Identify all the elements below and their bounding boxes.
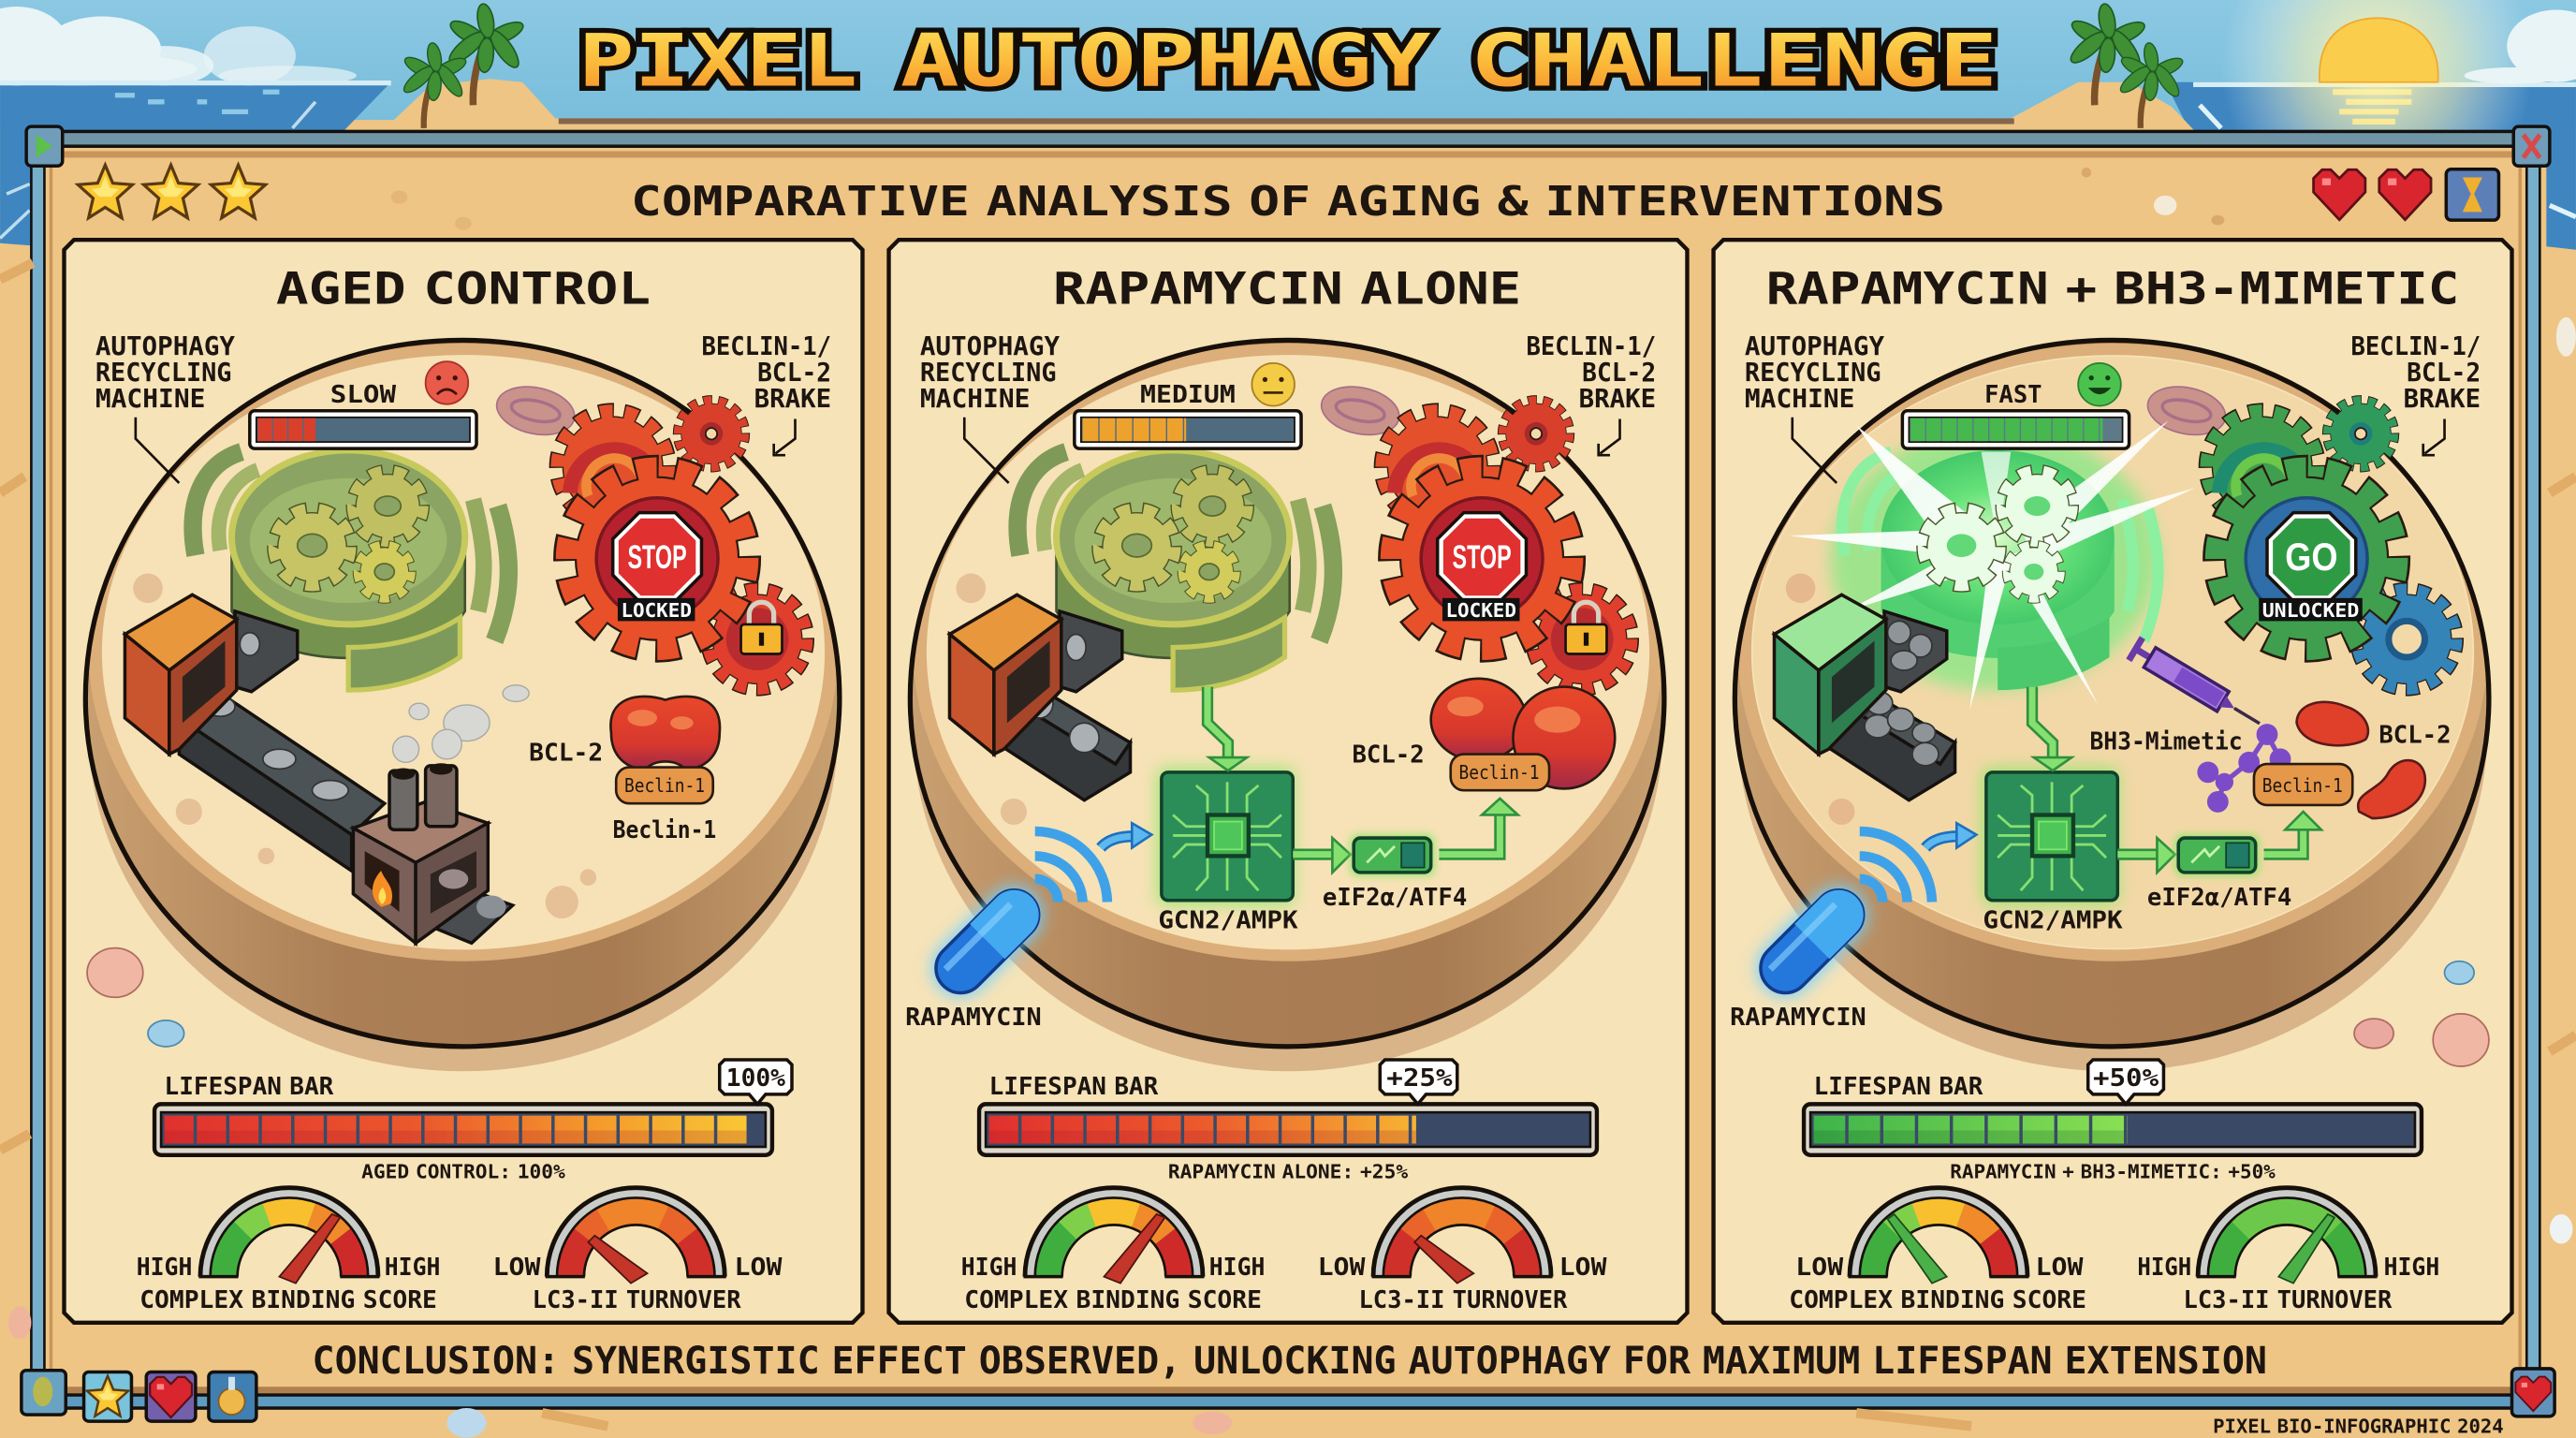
callout: +50% — [2088, 1060, 2163, 1104]
panel background — [889, 240, 1687, 1323]
shells — [87, 948, 184, 1047]
gauge: complex binding — [1789, 1188, 2086, 1313]
label: brake: BCL-2 — [2407, 359, 2481, 388]
unlocked tag: UNLOCKED — [2262, 599, 2359, 622]
label: gcn2/ampk: GCN2/AMPK — [1158, 906, 1298, 934]
sky — [0, 0, 2576, 120]
label: autophagy machine: MACHINE — [920, 385, 1030, 414]
gauge: complex binding — [137, 1188, 440, 1313]
callout: +50%: +50% — [2093, 1064, 2159, 1092]
brake gears — [1383, 402, 1630, 687]
label: rapamycin: RAPAMYCIN — [1730, 1003, 1866, 1031]
left clouds — [0, 7, 391, 85]
speed bar — [250, 411, 476, 448]
stars row — [78, 165, 266, 218]
gauge: lc3-ii turnover: HIGH — [2384, 1253, 2439, 1281]
beclin-1 chip: Beclin-1 — [2262, 774, 2343, 797]
unlocked brake gears — [2208, 402, 2454, 687]
gauge: lc3-ii turnover: HIGH — [2137, 1253, 2191, 1281]
label: autophagy machine: RECYCLING — [1745, 359, 1881, 388]
cell disc — [85, 340, 840, 1071]
gauge: lc3-ii turnover: LOW — [735, 1253, 783, 1281]
up arrow to beclin — [1439, 799, 1518, 855]
gauge: complex binding: HIGH — [385, 1253, 440, 1281]
label: autophagy machine — [920, 332, 1061, 483]
speed label: MEDIUM — [1140, 380, 1236, 408]
gauge: complex binding: LOW — [2036, 1253, 2084, 1281]
bcl-2 blobs with beclin — [1431, 679, 1615, 790]
label: brake: BECLIN-1/ — [2351, 332, 2481, 361]
panel: rapamycin alone — [889, 240, 1687, 1323]
label: autophagy machine: AUTOPHAGY — [1745, 332, 1885, 361]
gauge: complex binding: COMPLEX BINDING SCORE — [964, 1285, 1262, 1313]
lifespan bar — [979, 1104, 1597, 1155]
green gate — [1774, 594, 1886, 755]
label: autophagy machine: RECYCLING — [920, 359, 1057, 388]
gauge: complex binding — [961, 1188, 1265, 1313]
label: brake: BRAKE — [2404, 385, 2481, 414]
icon: stop sign: STOP — [627, 539, 687, 576]
label: brake: BECLIN-1/ — [701, 332, 831, 361]
label: autophagy machine: MACHINE — [95, 385, 205, 414]
beclin-1 chip — [2254, 764, 2352, 805]
lifespan label: LIFESPAN BAR — [1814, 1072, 1983, 1100]
gauge: lc3-ii turnover: LC3-II TURNOVER — [2183, 1285, 2393, 1313]
gauge: complex binding: COMPLEX BINDING SCORE — [139, 1285, 437, 1313]
icon: go sign — [2267, 513, 2356, 601]
label: rapamycin: RAPAMYCIN — [905, 1003, 1042, 1031]
label: eif2a/atf4: eIF2α/ATF4 — [2147, 883, 2291, 911]
speed label: SLOW — [330, 380, 397, 408]
panel heading: RAPAMYCIN ALONE — [1053, 264, 1521, 315]
right clouds — [2465, 10, 2576, 84]
icon: neutral face — [1251, 363, 1295, 405]
gauge: lc3-ii turnover: LC3-II TURNOVER — [1358, 1285, 1568, 1313]
icon: padlock — [1566, 602, 1606, 654]
palm trees left — [401, 3, 526, 128]
speed bar — [1902, 411, 2130, 448]
label: gcn2/ampk: GCN2/AMPK — [1983, 906, 2123, 934]
conveyor to furnace — [179, 611, 385, 871]
lifespan label: LIFESPAN BAR — [989, 1072, 1159, 1100]
label: bh3-mimetic: BH3-Mimetic — [2089, 726, 2243, 755]
gauge: lc3-ii turnover: LC3-II TURNOVER — [533, 1285, 741, 1313]
icon: stop sign — [1438, 513, 1526, 601]
panel heading: RAPAMYCIN + BH3-MIMETIC — [1766, 264, 2459, 315]
gauge: lc3-ii turnover: LOW — [1318, 1253, 1366, 1281]
title sand band with islands — [374, 79, 2202, 138]
label: brake — [701, 332, 831, 455]
conveyor gate — [124, 594, 237, 755]
lifespan label: LIFESPAN BAR — [165, 1072, 334, 1100]
shells — [2354, 961, 2489, 1066]
callout: 100% — [720, 1060, 792, 1104]
smoke — [393, 685, 529, 762]
signal pathway with capsule, chip and arrows — [1746, 687, 2259, 1007]
furnace — [353, 763, 513, 943]
pebbles — [956, 574, 1027, 825]
label: brake: BCL-2 — [1582, 359, 1656, 388]
gauge: lc3-ii turnover: LOW — [493, 1253, 541, 1281]
busy conveyor with many rocks — [1828, 611, 1955, 800]
footer credit: PIXEL BIO-INFOGRAPHIC 2024 — [2213, 1415, 2504, 1437]
signal pathway with capsule, chip and arrows — [921, 687, 1434, 1007]
callout: +25% — [1380, 1060, 1457, 1104]
icon: stop sign — [613, 513, 701, 601]
ocean right with sun reflection — [2165, 82, 2576, 250]
glowing recycling machine — [1789, 420, 2195, 710]
subtitle: COMPARATIVE ANALYSIS OF AGING & INTERVENTIONS — [631, 178, 1945, 226]
label: autophagy machine: RECYCLING — [95, 359, 232, 388]
icon: happy face — [2078, 363, 2121, 405]
bcl-2 blob bound to beclin: Beclin-1 — [624, 774, 705, 797]
lifespan bar — [1804, 1104, 2422, 1155]
recycling machine — [193, 450, 508, 690]
mitochondrion — [492, 380, 579, 442]
label: bcl-2: BCL-2 — [2378, 720, 2452, 748]
caption: AGED CONTROL: 100% — [361, 1160, 565, 1182]
top right post with red x — [2513, 126, 2550, 166]
arrow to beclin — [2263, 812, 2321, 855]
short conveyor — [1003, 611, 1131, 800]
label: autophagy machine — [1745, 332, 1885, 483]
free bcl-2 fragments — [2297, 702, 2425, 818]
gauge: complex binding: HIGH — [1209, 1253, 1265, 1281]
gauge: complex binding: HIGH — [961, 1253, 1017, 1281]
panel: aged control — [65, 240, 862, 1323]
recycling machine — [1017, 450, 1333, 690]
speed label: FAST — [1984, 380, 2042, 408]
palm trees right — [2067, 3, 2185, 128]
gauge: lc3-ii turnover — [1318, 1188, 1607, 1313]
panel heading: AGED CONTROL — [276, 264, 651, 315]
hourglass box icon — [2446, 169, 2498, 220]
conveyor gate — [949, 594, 1061, 755]
label: brake — [1526, 332, 1656, 455]
panel background — [65, 240, 862, 1323]
cell disc — [910, 340, 1664, 1071]
gauge: complex binding: LOW — [1795, 1253, 1844, 1281]
gauge: lc3-ii turnover — [2137, 1188, 2439, 1313]
gauge: lc3-ii turnover — [493, 1188, 783, 1313]
gauge: lc3-ii turnover: LOW — [1559, 1253, 1607, 1281]
label: brake: BRAKE — [754, 385, 831, 414]
icon: syringe — [2129, 638, 2266, 735]
label: bcl-2: BCL-2 — [529, 739, 603, 767]
sun — [2221, 0, 2533, 222]
label: brake: BECLIN-1/ — [1526, 332, 1656, 361]
title — [578, 19, 1998, 103]
panel: rapamycin + bh3-mimetic — [1714, 240, 2511, 1323]
hearts row — [2314, 169, 2431, 220]
label: brake: BRAKE — [1579, 385, 1656, 414]
label: autophagy machine: AUTOPHAGY — [95, 332, 236, 361]
panel background — [1714, 240, 2511, 1323]
mitochondrion — [2144, 380, 2230, 442]
icon: padlock — [741, 602, 782, 654]
locked tag: LOCKED — [1445, 599, 1516, 622]
caption: RAPAMYCIN + BH3-MIMETIC: +50% — [1950, 1160, 2276, 1182]
icon: go sign: GO — [2285, 535, 2337, 579]
bottom left icon row — [22, 1371, 256, 1421]
lifespan bar — [154, 1104, 772, 1155]
title: AUTOPHAGY — [900, 19, 1431, 103]
gauge: complex binding: COMPLEX BINDING SCORE — [1789, 1285, 2086, 1313]
bottom right post with heart — [2511, 1369, 2554, 1416]
conclusion: CONCLUSION: SYNERGISTIC EFFECT OBSERVED, UNLOCKING AUTOPHAGY FOR MAXIMUM LIFESPAN EXTENSION — [313, 1339, 2267, 1383]
title: PIXEL — [578, 19, 857, 103]
label: brake: BCL-2 — [757, 359, 831, 388]
molecule — [2200, 726, 2289, 810]
pebbles — [133, 574, 596, 918]
pebbles — [1786, 574, 1854, 825]
title: CHALLENGE — [1471, 19, 1998, 103]
bcl-2 blobs with beclin: Beclin-1 — [1459, 761, 1540, 784]
bcl-2 blob bound to beclin — [610, 697, 720, 803]
label: brake — [2351, 332, 2481, 455]
label: beclin-1: Beclin-1 — [613, 815, 716, 844]
brake gears — [559, 402, 805, 687]
top left post with green play icon — [26, 126, 63, 166]
mitochondrion — [1317, 380, 1404, 442]
callout: 100%: 100% — [726, 1064, 786, 1092]
icon: sad face — [426, 361, 468, 404]
label: bcl-2: BCL-2 — [1352, 740, 1425, 768]
icon: stop sign: STOP — [1453, 539, 1512, 576]
locked tag: LOCKED — [621, 599, 692, 622]
ocean left — [0, 82, 391, 246]
label: autophagy machine — [95, 332, 236, 483]
cell disc — [1734, 340, 2489, 1071]
label: eif2a/atf4: eIF2α/ATF4 — [1323, 883, 1467, 911]
label: autophagy machine: AUTOPHAGY — [920, 332, 1061, 361]
label: autophagy machine: MACHINE — [1745, 385, 1854, 414]
caption: RAPAMYCIN ALONE: +25% — [1168, 1160, 1408, 1182]
gauge: complex binding: HIGH — [137, 1253, 192, 1281]
callout: +25%: +25% — [1386, 1064, 1453, 1092]
speed bar — [1075, 411, 1301, 448]
